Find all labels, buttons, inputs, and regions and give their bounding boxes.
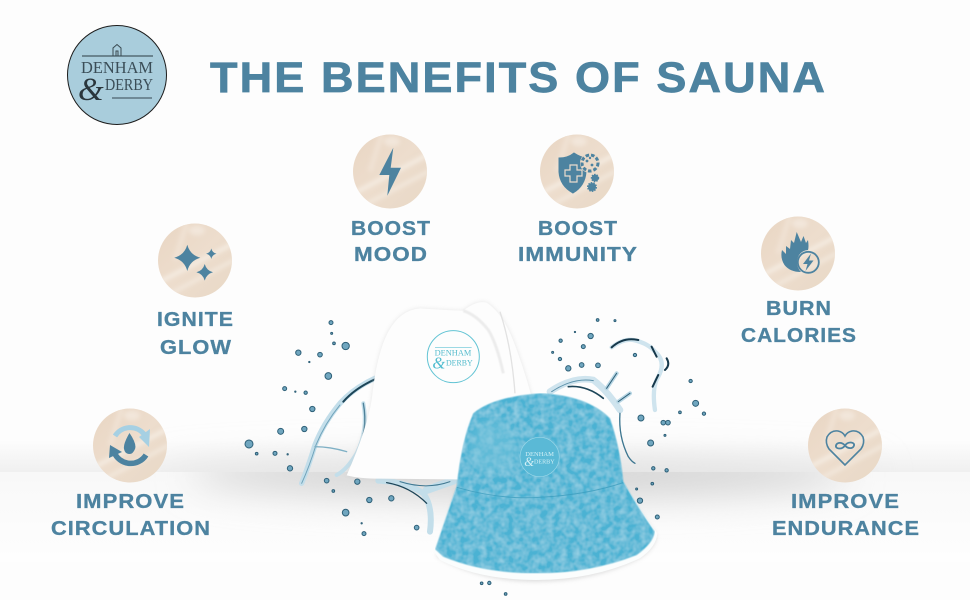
label: ignite glow	[157, 308, 234, 359]
benefit: improve circulation	[51, 408, 211, 540]
white drawstring bag	[347, 302, 533, 480]
brand logo: DENHAM	[81, 58, 153, 77]
product photo: bag, hat and water splash	[245, 302, 706, 595]
label: improve circulation	[51, 490, 211, 540]
brand logo: DERBY	[105, 75, 153, 94]
benefit: ignite glow	[155, 222, 237, 359]
blue bucket hat	[434, 393, 657, 582]
benefit: burn calories	[741, 216, 857, 347]
icon: heart with infinity	[805, 408, 887, 482]
water splash	[245, 319, 706, 595]
icon: sparkles	[155, 222, 237, 298]
benefit: boost immunity	[518, 134, 638, 266]
label: ignite glow: IGNITE	[157, 308, 234, 331]
brand logo: &	[78, 72, 104, 108]
icon: water cycle	[90, 408, 172, 482]
label: improve endurance: ENDURANCE	[772, 517, 920, 540]
label: burn calories: BURN	[766, 297, 832, 320]
brand logo	[68, 26, 166, 124]
label: boost immunity: IMMUNITY	[518, 243, 638, 266]
label: boost immunity	[518, 217, 638, 266]
title: THE BENEFITS OF SAUNA	[210, 54, 827, 102]
label: improve endurance	[772, 490, 920, 540]
benefit: improve endurance	[772, 408, 920, 540]
icon: lightning bolt	[350, 134, 432, 208]
blue bucket hat: DENHAM	[525, 451, 554, 458]
icon: flame and energy	[758, 216, 840, 290]
label: boost immunity: BOOST	[538, 217, 618, 240]
label: improve endurance: IMPROVE	[791, 490, 900, 513]
label: improve circulation: IMPROVE	[76, 490, 185, 513]
white drawstring bag: &	[432, 354, 445, 373]
benefit: boost mood	[350, 134, 432, 266]
label: boost mood	[351, 217, 431, 266]
white drawstring bag: DENHAM	[435, 348, 472, 358]
icon: shield and germs	[537, 134, 619, 208]
label: boost mood: BOOST	[351, 217, 431, 240]
label: improve circulation: CIRCULATION	[51, 517, 211, 540]
label: burn calories	[741, 297, 857, 347]
label: ignite glow: GLOW	[160, 336, 232, 359]
white drawstring bag: DERBY	[446, 357, 473, 367]
blue bucket hat: &	[524, 455, 534, 469]
label: burn calories: CALORIES	[741, 324, 857, 347]
blue bucket hat: DERBY	[534, 458, 555, 465]
label: boost mood: MOOD	[354, 243, 428, 266]
background	[0, 445, 970, 516]
